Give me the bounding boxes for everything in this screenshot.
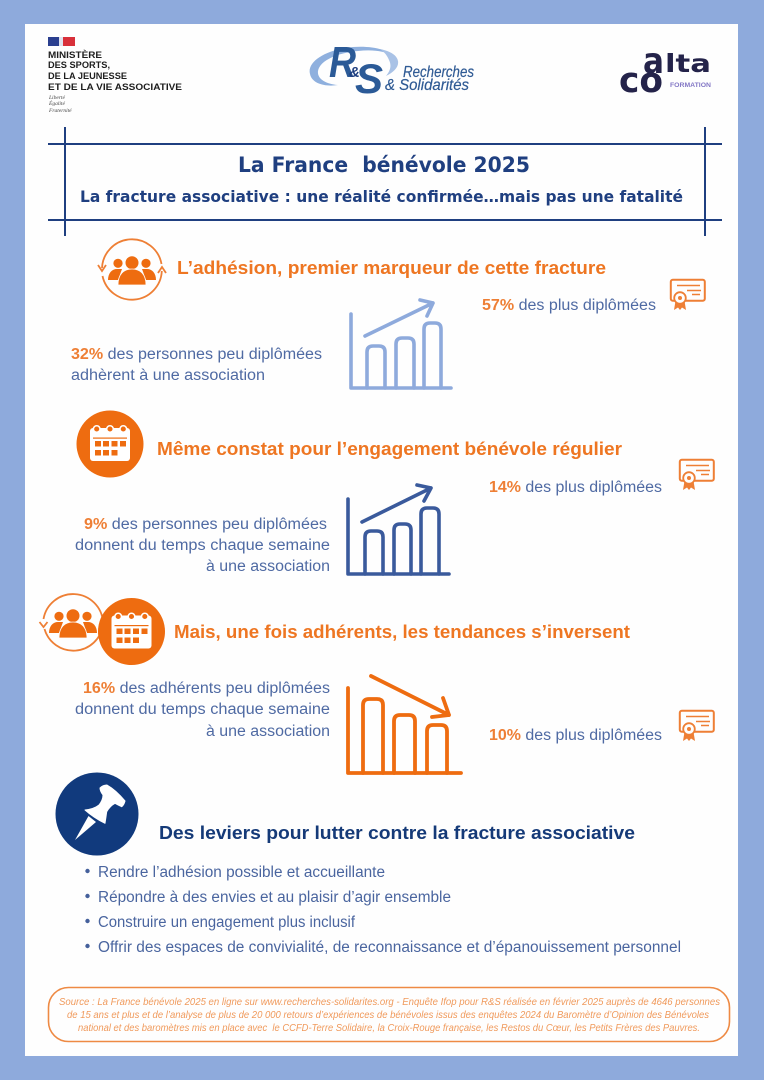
list of levers: Répondre à des envies et au plaisir d’agir ensemble — [98, 889, 451, 906]
icon: push pin — [56, 772, 138, 856]
source box: Source : La France bénévole 2025 en ligne sur www.recherches-solidarites.org - Enquête Ifop pour R&S réalisée en février 2025 auprès de 4646 personnes — [59, 997, 720, 1008]
heading: Des leviers pour lutter contre la fracture associative — [159, 823, 635, 843]
logo: ministère: MINISTÈRE — [48, 50, 102, 61]
subtitle: La fracture associative : une réalité confirmée…mais pas une fatalité — [80, 187, 683, 206]
icon: rising bar chart — [348, 485, 449, 574]
logo: Recherches & Solidarités: & Solidarités — [385, 77, 469, 94]
list of levers — [85, 864, 681, 956]
logo: ministère — [48, 37, 182, 114]
stat: 9%: donnent du temps chaque semaine — [75, 537, 330, 554]
logo: Recherches & Solidarités: R — [329, 38, 356, 87]
list of levers: Offrir des espaces de convivialité, de reconnaissance et d’épanouissement personnel — [98, 939, 681, 956]
logo: Recherches & Solidarités: S — [355, 55, 383, 102]
stat: 16%: 16% des adhérents peu diplômées — [83, 680, 330, 697]
stat: 16%: à une association — [206, 723, 330, 740]
logo: ministère: ET DE LA VIE ASSOCIATIVE — [48, 82, 182, 93]
logo: alta co formation: a — [643, 41, 664, 82]
list of levers: Construire un engagement plus inclusif — [98, 914, 356, 931]
icon: members circle — [98, 239, 166, 300]
logo: Recherches & Solidarités — [310, 38, 474, 102]
source box — [48, 988, 730, 1042]
section 1: adhésion — [71, 239, 705, 388]
stat: 16%: donnent du temps chaque semaine — [75, 701, 330, 718]
stat: 32%: 32% des personnes peu diplômées — [71, 346, 322, 363]
section 4: leviers — [56, 772, 681, 956]
source box: national et des baromètres mis en place avec le CCFD-Terre Solidaire, la Croix-Rouge française, les Restos du Cœur, les Petits Frères des Pauvres. — [78, 1023, 700, 1034]
logo: ministère: DES SPORTS, — [48, 60, 110, 71]
section 2: engagement régulier — [75, 410, 714, 575]
heading: L’adhésion, premier marqueur de cette fracture — [177, 258, 606, 278]
stat: 9%: à une association — [206, 558, 330, 575]
icon: diploma — [680, 711, 714, 741]
stat: 32% — [71, 346, 322, 384]
icon: calendar circle — [76, 410, 144, 478]
logo: alta co formation: co — [619, 61, 663, 101]
icon: rising bar chart — [351, 300, 451, 388]
icon: members and calendar — [40, 594, 165, 665]
stat: 9% — [75, 516, 330, 575]
heading: Même constat pour l’engagement bénévole régulier — [157, 439, 622, 459]
stat: 57%: 57% des plus diplômées — [482, 297, 656, 314]
section 3: tendances inversées — [40, 594, 714, 773]
title frame — [48, 127, 722, 236]
title: La France bénévole 2025 — [238, 153, 530, 177]
logo: alta co formation: lta — [665, 49, 711, 78]
logo: ministère: Fraternité — [48, 108, 72, 114]
icon: diploma — [680, 460, 714, 490]
logo: ministère: DE LA JEUNESSE — [48, 71, 127, 82]
logo: Recherches & Solidarités: Recherches — [403, 64, 474, 81]
stat: 9%: 9% des personnes peu diplômées — [84, 516, 327, 533]
logo: alta co formation — [619, 41, 711, 101]
icon: falling bar chart — [348, 676, 461, 773]
logo: alta co formation: FORMATION — [670, 83, 711, 89]
logo: Recherches & Solidarités: & — [349, 64, 360, 81]
heading: Mais, une fois adhérents, les tendances s’inversent — [174, 622, 630, 642]
list of levers: Rendre l’adhésion possible et accueillante — [98, 864, 385, 881]
icon: diploma — [671, 280, 705, 310]
stat: 10%: 10% des plus diplômées — [489, 727, 662, 744]
stat: 32%: adhèrent à une association — [71, 367, 265, 384]
stat: 16% — [75, 680, 330, 740]
logo: ministère: Égalité — [48, 99, 65, 107]
source box: de 15 ans et plus et de l’analyse de plus de 20 000 retours d’expériences de bénévoles issus des enquêtes 2024 du Baromètre d’Opinion des Bénévoles — [67, 1010, 709, 1021]
stat: 14%: 14% des plus diplômées — [489, 479, 662, 496]
logo: ministère: Liberté — [48, 95, 65, 101]
